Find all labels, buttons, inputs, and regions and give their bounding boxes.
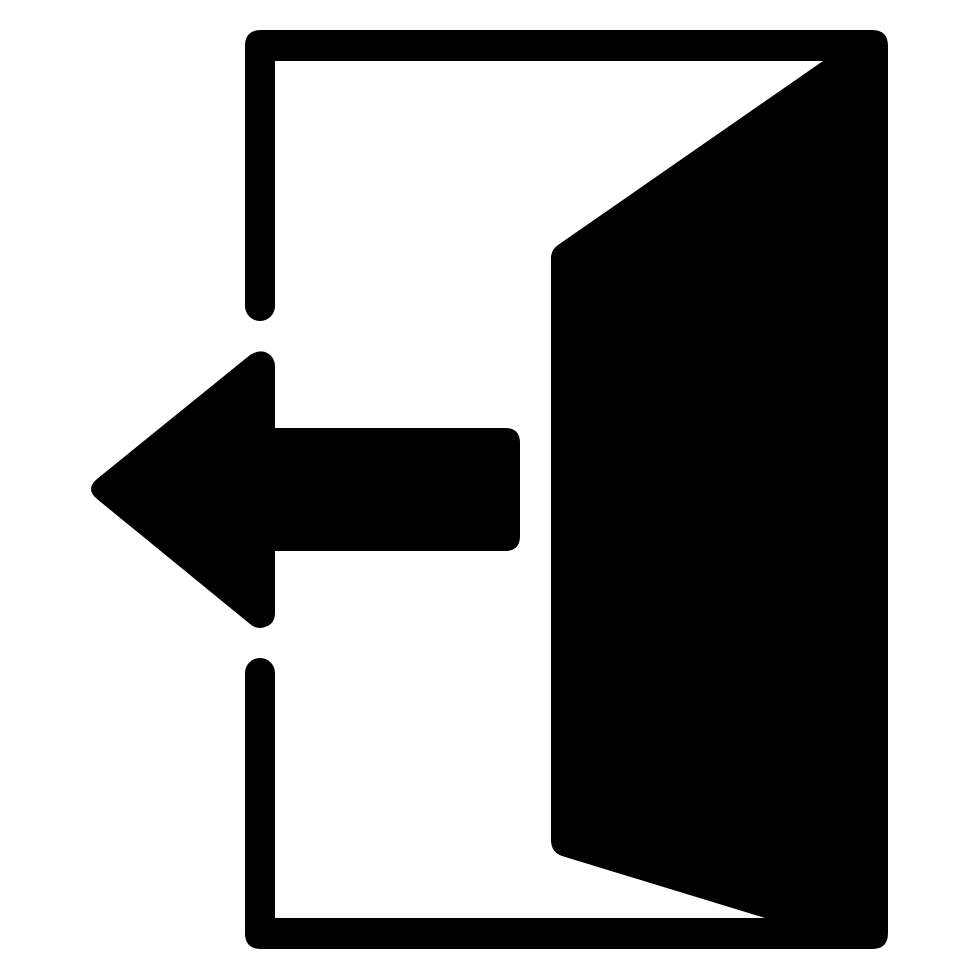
arrow pointing left [91, 351, 520, 628]
door frame and open door panel [245, 30, 888, 949]
